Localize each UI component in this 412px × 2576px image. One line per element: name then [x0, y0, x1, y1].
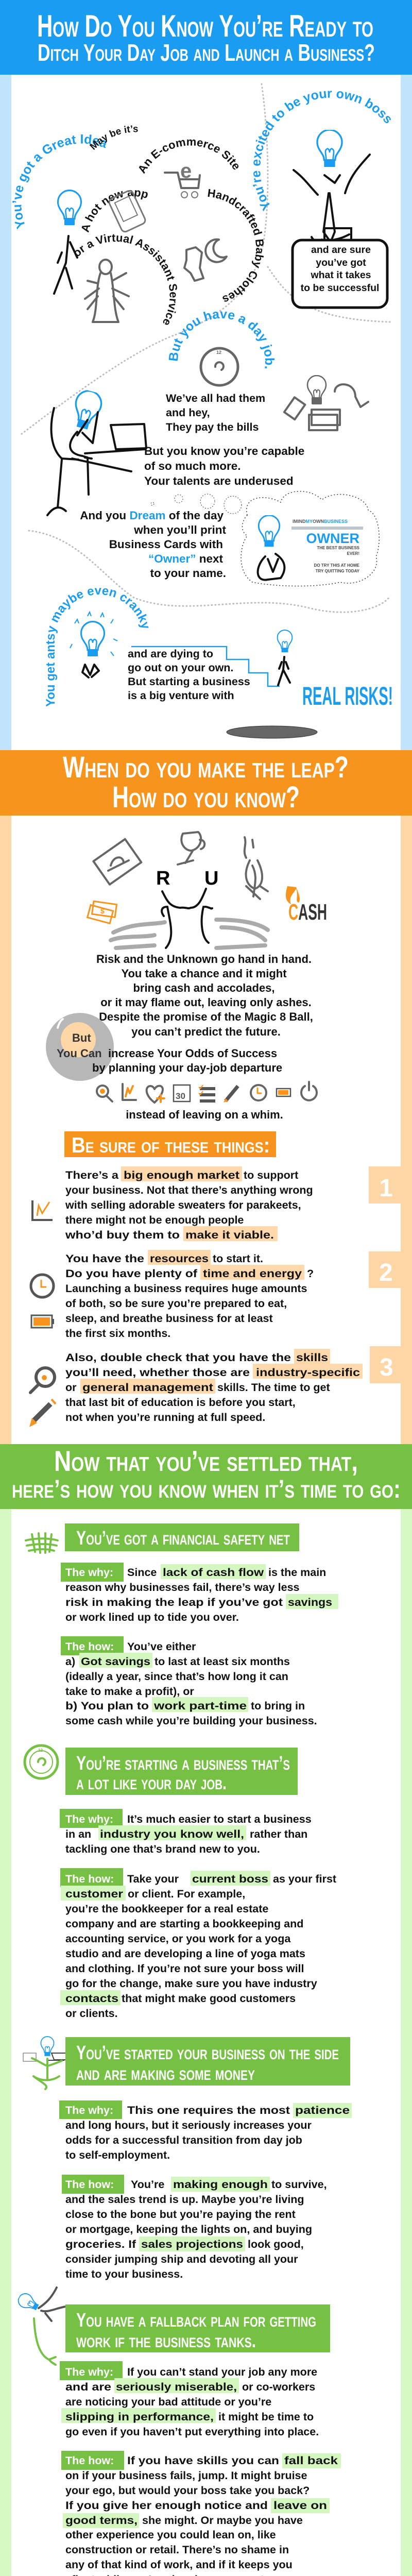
the why: The why: [65, 1813, 113, 1825]
text: dying to go [128, 648, 250, 702]
the why: If you can’t stand your job any more [127, 2366, 317, 2378]
business card: TRY QUITTING TODAY [316, 569, 360, 573]
the how: to bring in [251, 1700, 305, 1712]
the why: patience [295, 2104, 350, 2116]
text: increase odds: increase Your Odds of Success [108, 1047, 277, 1060]
heading: when do you make the leap: How do you know? [112, 781, 300, 814]
the why: risk in making the leap if you’ve got [65, 1596, 283, 1608]
item 2: resources: Launching a business requires huge amounts [65, 1282, 307, 1295]
the why: to self-employment. [65, 2149, 170, 2161]
dotted dividers section 1 [21, 84, 391, 612]
the how: fall back [284, 2454, 338, 2467]
the why: It’s much easier to start a business [127, 1813, 312, 1825]
text: dream: And you Dream of the day [80, 509, 224, 522]
the why: savings [288, 1596, 332, 1608]
the why [61, 1563, 338, 1623]
curved text: but you have a day job: But you have a day job. [169, 311, 275, 368]
icon: cash fire: CASH [288, 900, 327, 925]
item 2: resources [31, 1250, 401, 1340]
text: we've all had them: They pay the bills [166, 421, 259, 433]
the how: on if your business fails, jump. It might bruise [65, 2469, 307, 2482]
item 1: big enough market: to support [244, 1169, 298, 1181]
the why: This one requires the most [127, 2104, 290, 2116]
title [37, 9, 375, 66]
the how: some cash while you’re building your business. [65, 1715, 317, 1727]
text: dying to go: go out on your own. [128, 662, 233, 674]
the how: studio and are developing a line of yoga mats [65, 1947, 305, 1960]
the why [60, 1809, 312, 1855]
the why: seriously miserable, [116, 2381, 237, 2393]
heading: now that you've settled that [12, 1445, 401, 1503]
item 3: skills: that last bit of education is before you start, [65, 1396, 296, 1409]
the how: to survive, [271, 2178, 327, 2191]
the why: and are [65, 2381, 111, 2393]
icon: owner figure [258, 515, 284, 580]
item 2: resources: to start it. [213, 1252, 263, 1265]
item 3: skills: Also, double check that you have the [65, 1351, 291, 1364]
sub-heading [65, 2037, 350, 2086]
curved text: virtual assistant: or a Virtual Assistant Service [75, 234, 177, 325]
figure [162, 889, 212, 948]
the how: You’re [131, 2178, 164, 2191]
item 3: skills: not when you’re running at full speed. [65, 1411, 265, 1423]
illustration: risk and unknown [88, 832, 327, 948]
icon: money [88, 901, 117, 923]
icon: phone [108, 190, 146, 233]
the how: other experience you could lean on, like [65, 2529, 276, 2541]
item 2: resources: resources [150, 1252, 209, 1265]
business card: OWNER [306, 531, 359, 546]
text: capable of more [144, 445, 304, 487]
the why [60, 2361, 319, 2438]
item 2: resources: sleep, and breathe business for at least [65, 1312, 273, 1325]
the how: company and are starting a bookkeeping and [65, 1918, 303, 1930]
icon: magic 8 ball: But [72, 1031, 91, 1044]
the how: work part-time [153, 1700, 247, 1712]
the how: Got savings [81, 1655, 150, 1668]
the how: or clients. [65, 2007, 118, 2020]
the how: The how: [65, 2454, 114, 2467]
text: capable of more: Your talents are underused [144, 474, 294, 487]
number 2 [369, 1251, 401, 1288]
the how: current boss [192, 1873, 268, 1885]
item 3: skills: or [65, 1381, 77, 1394]
icon: net [26, 1533, 58, 1553]
panel: excited to be your own boss [253, 91, 391, 309]
text: risk paragraph: you can’t predict the future. [131, 1025, 281, 1038]
the how: any of that kind of work, and if it keeps you [65, 2558, 293, 2571]
sub-heading: a lot like your day job. [76, 1772, 227, 1794]
briefcase: to be successful [301, 282, 379, 294]
icon: e-commerce cart [165, 160, 200, 198]
the why [59, 2100, 352, 2161]
thought cloud [151, 492, 379, 586]
the how: making enough [173, 2178, 268, 2191]
the how: If you give her enough notice and [65, 2499, 268, 2512]
sub-heading: and are making some money [76, 2063, 255, 2084]
text: dream: “Owner” next [148, 552, 224, 565]
item 3: skills: skills. The time to get [217, 1381, 330, 1394]
the why: is the main [268, 1566, 326, 1579]
text: we've all had them: and hey, [166, 406, 210, 419]
icon: clock [201, 348, 238, 385]
the how: she might. Or maybe you have [142, 2514, 303, 2527]
icon: magic 8 ball: You Can [57, 1047, 102, 1060]
item 1: big enough market [32, 1166, 401, 1241]
icon: fire [245, 837, 268, 899]
the how: or client. For example, [128, 1888, 245, 1900]
briefcase: and are sure [311, 244, 371, 256]
icon: diving figure [16, 2287, 72, 2365]
the how: The how: [65, 2178, 114, 2191]
the why: it might be time to [218, 2411, 314, 2423]
the how: If you have skills you can [127, 2454, 279, 2467]
sub-heading: You’re starting a business that’s [76, 1753, 290, 1774]
item 2: resources: You have the [65, 1252, 144, 1265]
the how: go for the change, make sure you have industry [65, 1977, 317, 1990]
curved text: hot new app: A hot new app [81, 190, 148, 233]
icons row [97, 1082, 317, 1103]
the how: look good, [248, 2238, 304, 2250]
the why: slipping in performance, [65, 2411, 214, 2423]
sub-heading: work if the business tanks. [76, 2330, 256, 2352]
the why: in an [65, 1828, 91, 1840]
icon: battery [31, 1315, 52, 1328]
sub-heading: You’ve got a financial safety net [76, 1528, 290, 1549]
the how: consider jumping ship and devoting all your [65, 2253, 298, 2265]
item 1: big enough market: big enough market [124, 1169, 239, 1181]
business card: THE BEST BUSINESS [317, 546, 360, 550]
text: dream: when you’ll print [133, 523, 227, 536]
the why: lack of cash flow [163, 1566, 264, 1579]
text: capable of more: But you know you’re capable [144, 445, 304, 457]
text: risk paragraph: Risk and the Unknown go hand in hand. [96, 953, 312, 965]
sub-heading [65, 1523, 299, 1551]
the how: close to the bone but you’re paying the rent [65, 2208, 296, 2221]
section: financial safety net [26, 1523, 338, 1727]
icon: cash fire [286, 886, 327, 925]
item 1: big enough market: with selling adorable sweaters for parakeets, [65, 1199, 301, 1211]
business card [291, 519, 363, 573]
item 2: resources: the first six months. [65, 1327, 170, 1340]
icon: agitated bulb [70, 612, 117, 677]
the how: accounting service, or you work for a yoga [65, 1933, 291, 1945]
the why: industry you know well, [100, 1828, 244, 1840]
panel: great idea spiral [12, 126, 264, 325]
section: fallback plan [16, 2287, 341, 2576]
briefcase: what it takes [310, 269, 371, 281]
text: risk paragraph: or it may flame out, leaving only ashes. [100, 996, 312, 1009]
heading: be sure of these things: Be sure of these things: [72, 1133, 270, 1157]
curved text: e-commerce: An E-commerce Site [139, 139, 239, 174]
heading: when do you make the leap [63, 751, 349, 814]
the why: are noticing your bad attitude or you’re [65, 2396, 271, 2408]
the how: you’re the bookkeeper for a real estate [65, 1903, 268, 1915]
the why: or co-workers [242, 2381, 315, 2393]
item 1: big enough market: your business. Not that there’s anything wrong [65, 1184, 313, 1196]
the why: odds for a successful transition from day job [65, 2134, 302, 2146]
number 1 [369, 1166, 401, 1204]
business card: EVER! [347, 551, 359, 556]
the how: The how: [65, 1640, 114, 1653]
panel: antsy / real risks [46, 588, 393, 739]
item 3: skills: general management [82, 1381, 213, 1394]
illustration: risk and unknown: U [204, 868, 218, 889]
icon: pencil [33, 1404, 50, 1421]
item 1: big enough market: who’d buy them to [65, 1229, 180, 1241]
the how: b) You plan to [65, 1700, 149, 1712]
text: risk paragraph [96, 953, 313, 1038]
icons: bills [284, 376, 368, 430]
the how: Take your [127, 1873, 179, 1885]
the how: sales projections [141, 2238, 243, 2250]
icon: chart [32, 1200, 53, 1220]
briefcase [293, 228, 387, 308]
the how [62, 2175, 327, 2280]
icons row: 30 [176, 1091, 185, 1101]
icon: magnifier [36, 1368, 55, 1386]
sub-heading [65, 1748, 298, 1795]
briefcase: you’ve got [316, 257, 366, 268]
panel: day job [46, 311, 371, 526]
item 1: big enough market: make it viable. [185, 1229, 274, 1241]
item 3: skills: skills [296, 1351, 328, 1364]
curved text: antsy: You get antsy maybe even cranky [46, 588, 149, 707]
number 3: 3 [380, 1354, 393, 1381]
icon: picture frame [93, 839, 141, 885]
the how [61, 1636, 317, 1727]
the why: or work lined up to tide you over. [65, 1611, 239, 1623]
icon: money: $ [100, 907, 105, 915]
business card: IMINDMYOWNBUSINESS [293, 519, 348, 524]
section: like your day job [25, 1745, 336, 2020]
text: instead of whim: instead of leaving on a whim. [126, 1108, 283, 1121]
the how: The how: [65, 1873, 114, 1885]
the why: reason why businesses fail, there’s way less [65, 1581, 300, 1594]
curved text: may be it's: May be it’s [90, 126, 138, 150]
panel: dream of owner [80, 492, 379, 586]
text: dying to go: and are dying to [128, 648, 213, 660]
item 3: skills: you’ll need, whether those are [65, 1366, 250, 1379]
item 1: big enough market: There’s a [65, 1169, 119, 1181]
the how [60, 1868, 336, 2020]
the how: customer [65, 1888, 124, 1900]
sub-heading [65, 2304, 330, 2352]
text: we've all had them: We’ve all had them [166, 392, 265, 404]
curved text: You’re excited to be your own boss [253, 91, 391, 211]
the how: groceries. If [65, 2238, 136, 2250]
the how: a) [65, 1655, 75, 1668]
the why: Since [127, 1566, 157, 1579]
curved text: handcrafted baby clothes: Handcrafted Baby Clothes [208, 189, 264, 302]
text: risk paragraph: You take a chance and it might [121, 967, 287, 980]
icon: clock [31, 1275, 54, 1297]
section: started on the side [23, 2037, 352, 2280]
item 2: resources: Do you have plenty of [65, 1267, 198, 1280]
the how: and the sales trend is up. Maybe you’re living [65, 2193, 304, 2206]
text: dream: to your name. [150, 567, 226, 580]
icon: e-commerce cart: e [180, 160, 192, 182]
text: increase odds: by planning your day-job departure [92, 1061, 282, 1074]
text: dying to go: is a big venture with [128, 689, 234, 702]
the how [61, 2451, 341, 2576]
text: capable of more: of so much more. [144, 460, 241, 472]
item 3: skills: industry-specific [256, 1366, 360, 1379]
the how: construction or retail. There’s no shame in [65, 2544, 289, 2556]
the why: The why: [65, 1566, 113, 1579]
the how: time to your business. [65, 2268, 183, 2280]
icon: baby clothes [184, 240, 227, 281]
number 2: 2 [379, 1259, 393, 1286]
icon: virtual assistant [85, 260, 129, 322]
number 1: 1 [379, 1175, 393, 1202]
stair line [131, 647, 280, 686]
the how: as your first [273, 1873, 336, 1885]
icon: trophy [178, 832, 204, 865]
the how: good terms, [65, 2514, 138, 2527]
item 2: resources: ? [307, 1267, 314, 1280]
the why: and long hours, but it seriously increases your [65, 2119, 312, 2131]
icon: walking figure [278, 630, 292, 685]
the how: (ideally a year, since that’s how long it can [65, 1670, 288, 1683]
the how: and clothing. If you’re not sure your boss will [65, 1962, 304, 1975]
curved text: you've got a great idea: You’ve got a Great Idea [12, 134, 106, 230]
icon: green clock: 12 [38, 1748, 43, 1753]
the how: that might make good customers [122, 1992, 296, 2005]
icon: clock: 12 [216, 350, 221, 355]
item 1: big enough market: there might not be enough people [65, 1214, 244, 1226]
text: dream: Business Cards with [109, 538, 223, 551]
the why: rather than [250, 1828, 307, 1840]
icon: bulb person [54, 191, 81, 294]
item 3: skills [29, 1346, 401, 1427]
sub-heading: You have a fallback plan for getting [76, 2310, 316, 2331]
icon: cheering figure [294, 130, 370, 242]
text: dream [80, 509, 227, 580]
the how: You’ve either [127, 1640, 196, 1653]
text: risk paragraph: Despite the promise of the Magic 8 Ball, [99, 1010, 313, 1023]
item 2: resources: of both, so be sure you’re prepared to eat, [65, 1297, 287, 1310]
the how: take to make a profit), or [65, 1685, 194, 1698]
text: increase odds [92, 1047, 282, 1074]
the why: The why: [65, 2366, 113, 2378]
hole [227, 726, 317, 738]
text: dying to go: But starting a business [128, 675, 250, 688]
icon: green clock [25, 1745, 58, 1778]
the how: leave on [273, 2499, 327, 2512]
the how: contacts [65, 1992, 118, 2005]
item 2: resources: time and energy [203, 1267, 302, 1280]
business card: DO TRY THIS AT HOME [314, 563, 360, 568]
the why: The why: [65, 2104, 113, 2116]
text: we've all had them [166, 392, 265, 433]
icon: magic 8 ball [46, 1013, 114, 1081]
the how: your ego, but would your boss take you back? [65, 2484, 310, 2497]
puddles [111, 920, 268, 948]
letters R U: R [156, 868, 170, 889]
the how: or mortgage, keeping the lights on, and buying [65, 2223, 312, 2235]
text: risk paragraph: bring cash and accolades, [133, 981, 275, 994]
icon: meditating figure [23, 2037, 67, 2089]
the why: go even if you haven’t put everything into place. [65, 2426, 319, 2438]
icon: desk worker [47, 388, 146, 515]
the why: tackling one that’s brand new to you. [65, 1843, 260, 1855]
the how: to last at least six months [154, 1655, 290, 1668]
number 3 [370, 1346, 401, 1383]
